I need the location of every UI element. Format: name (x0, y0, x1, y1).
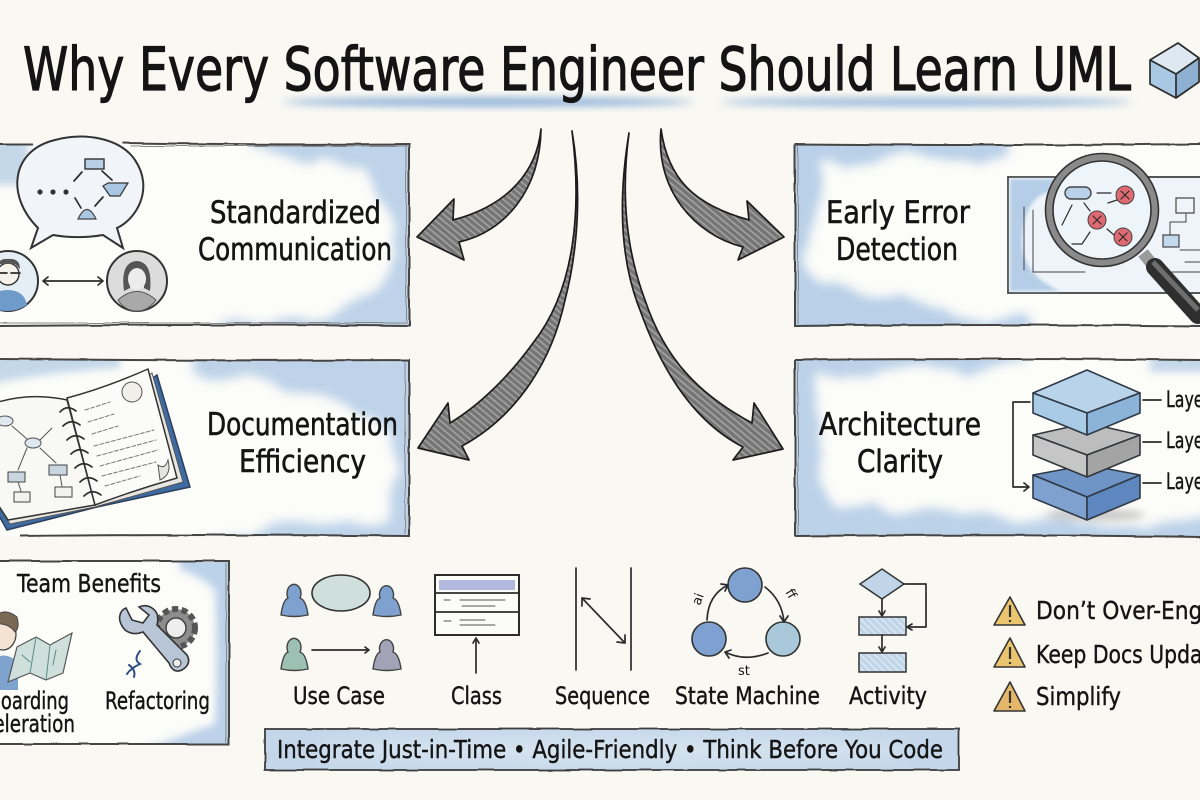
icon: person with map (0, 612, 72, 690)
heading: early error detection: Detection (836, 232, 958, 268)
icon: blueprint with magnifier (1008, 154, 1200, 315)
diagram: use case (281, 575, 401, 710)
diagram: sequence (555, 568, 650, 710)
banner (265, 729, 959, 770)
sub-element: magnifier handle (1143, 253, 1198, 315)
diagram: state machine: st (738, 664, 750, 679)
banner: Integrate Just-in-Time • Agile-Friendly • Think Before You Code (277, 735, 943, 764)
panel: architecture clarity (794, 358, 1200, 538)
diagram: activity: Activity (849, 682, 927, 710)
heading: documentation efficiency: Efficiency (239, 444, 366, 480)
heading: early error detection (826, 195, 970, 268)
diagram: state machine: State Machine (675, 682, 820, 710)
icon: wrench and gear (120, 606, 195, 677)
sub-element: layer labels (1143, 388, 1200, 495)
arrow: to early error detection (660, 129, 784, 260)
diagram: class: Class (451, 682, 502, 710)
warning: simplify (994, 682, 1121, 711)
icon: layered stack (1013, 370, 1200, 521)
heading: architecture clarity: Architecture (819, 407, 981, 443)
diagram: class (435, 575, 519, 710)
heading: architecture clarity (819, 407, 981, 480)
sub-element: page flow diagram (0, 416, 72, 502)
sub-element: middle layer (1033, 423, 1140, 477)
panel: early error detection (794, 142, 1200, 328)
diagram: state machine: ai (690, 591, 708, 607)
heading: early error detection: Early Error (826, 195, 970, 231)
panel: standardized communication (0, 136, 411, 327)
heading: documentation efficiency (207, 407, 398, 480)
arrow: to architecture clarity (622, 133, 783, 460)
heading: standardized communication: Standardized (210, 195, 381, 231)
sub-element: bracket arrow (1013, 402, 1030, 491)
sub-element: magnifier lens (1046, 154, 1158, 266)
arrow: to standardized communication (417, 129, 541, 260)
sub-element: top layer (1033, 370, 1140, 435)
sub-element: notebook rings (60, 408, 101, 496)
warnings list (994, 596, 1200, 711)
panel: team benefits (0, 560, 230, 746)
icon: open spiral notebook (0, 369, 190, 530)
diagram: activity (849, 569, 927, 710)
diagram: use case: Use Case (293, 682, 385, 710)
icon: cube (1150, 43, 1199, 98)
label: onboarding acceleration (0, 687, 75, 738)
label: refactoring: Refactoring (105, 687, 210, 715)
heading: documentation efficiency: Documentation (207, 407, 398, 443)
diagram: state machine: ff (782, 586, 800, 603)
heading: team benefits: Team Benefits (16, 569, 161, 598)
heading: standardized communication (198, 195, 392, 268)
diagram: sequence: Sequence (555, 682, 650, 710)
panel: documentation efficiency (0, 358, 410, 538)
heading: standardized communication: Communication (198, 232, 392, 268)
sub-element: bottom layer (1033, 465, 1140, 520)
arrow: to documentation efficiency (418, 131, 578, 460)
icon: two people with arrow (0, 251, 167, 311)
sub-element: page notes (85, 382, 158, 486)
diagram: state machine (675, 568, 820, 710)
warning: simplify: Simplify (1036, 682, 1121, 711)
icon: speech bubble diagram (17, 137, 143, 248)
heading: architecture clarity: Clarity (857, 444, 943, 480)
